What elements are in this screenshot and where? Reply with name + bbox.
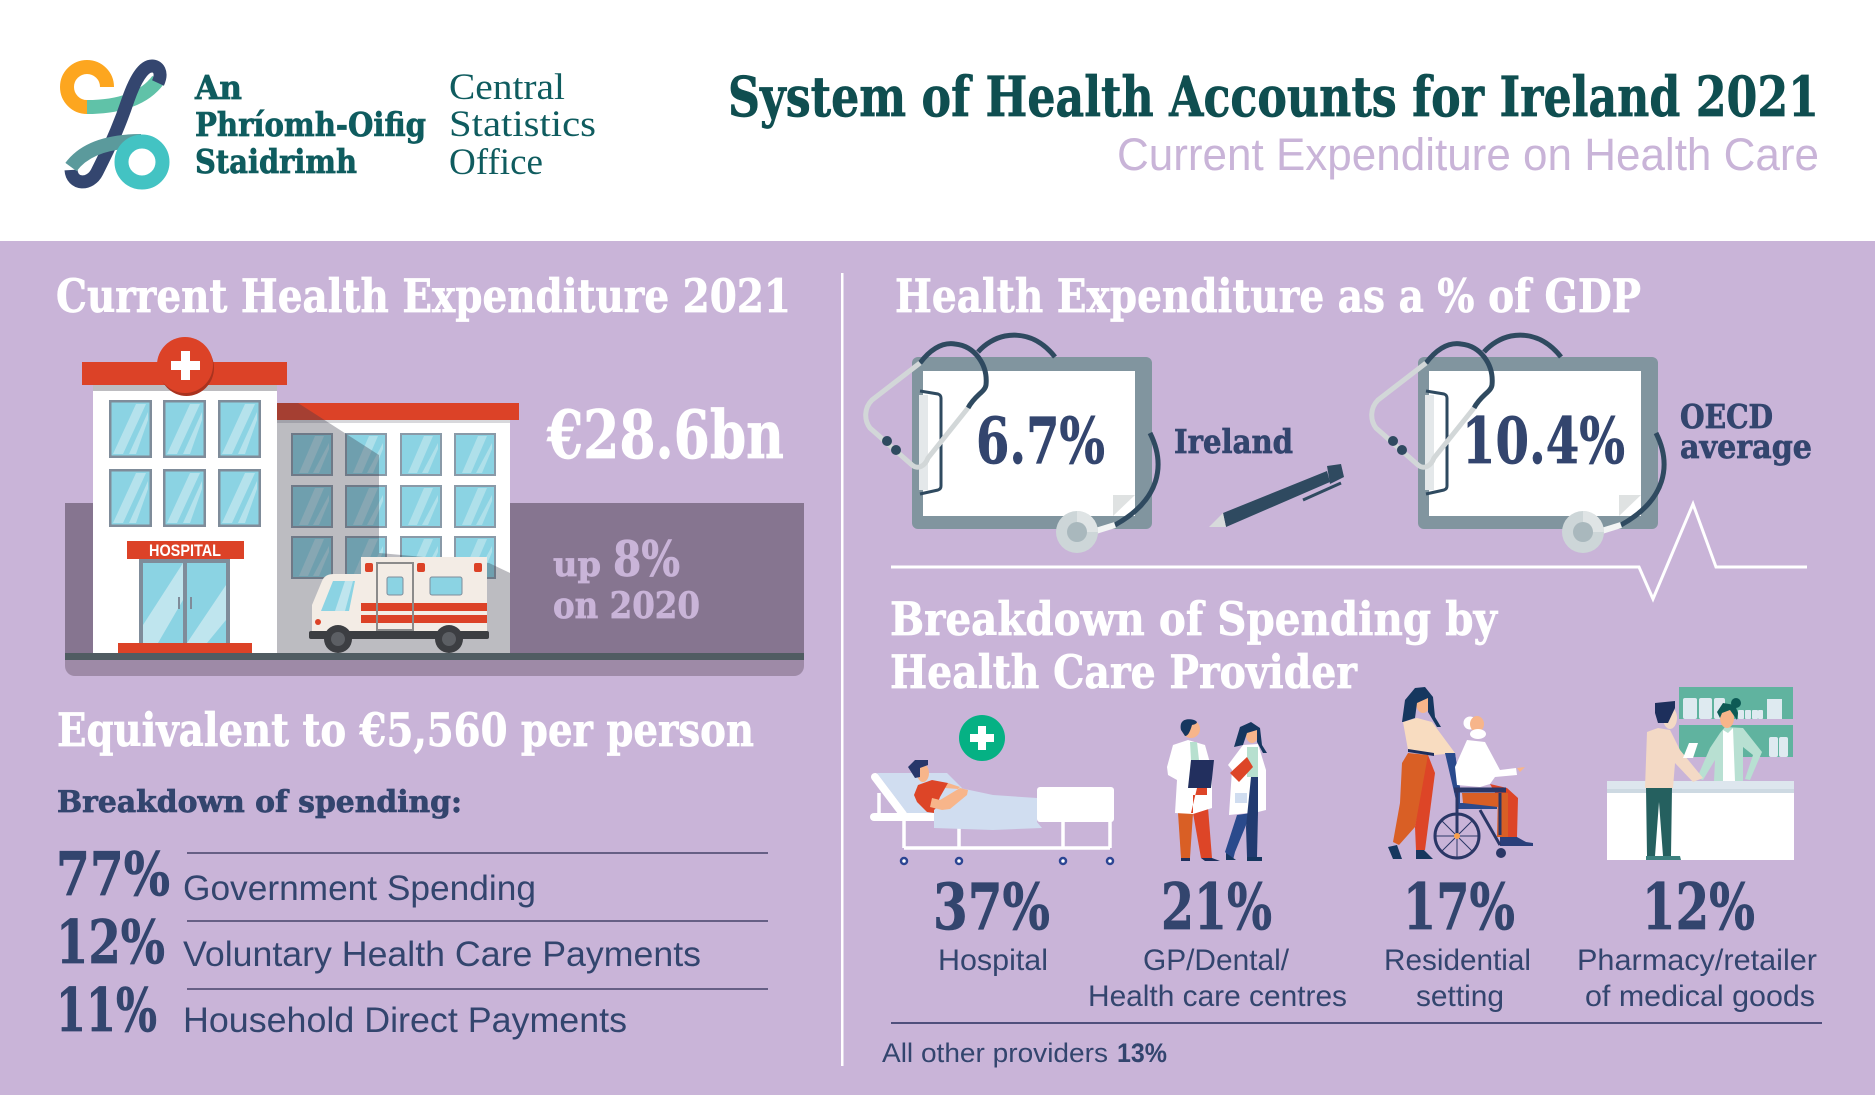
icon: green cross xyxy=(959,715,1005,761)
logo text: English name xyxy=(449,67,596,183)
ambulance xyxy=(309,557,489,653)
spending breakdown list xyxy=(56,840,768,1046)
heading: breakdown by provider xyxy=(890,592,1498,699)
main hospital building xyxy=(82,337,287,653)
change on 2020: on 2020 xyxy=(553,585,700,627)
row: government: 77% xyxy=(56,840,170,910)
illustration: hospital bed xyxy=(874,715,1114,864)
heading: breakdown by provider: Breakdown of Spending by xyxy=(890,592,1498,646)
stat: GP/dental: GP/Dental/ xyxy=(1143,944,1290,977)
panel: purple main background xyxy=(0,241,1875,1095)
illustration: doctors xyxy=(1167,719,1267,861)
bottom rule xyxy=(891,1022,1822,1024)
heading: GDP: Health Expenditure as a % of GDP xyxy=(895,269,1641,323)
row: government: Government Spending xyxy=(183,869,536,908)
stat: residential: setting xyxy=(1416,980,1504,1013)
ECG line xyxy=(891,504,1807,599)
stat: GP/dental xyxy=(1088,870,1347,1013)
clipboard: Ireland xyxy=(866,335,1158,553)
stat: pharmacy: 12% xyxy=(1642,870,1755,945)
logo: Central Statistics Office xyxy=(67,66,596,183)
label: OECD average: OECD xyxy=(1680,397,1773,436)
logo text: English name: Central xyxy=(449,67,565,108)
stat: GP/dental: 21% xyxy=(1161,870,1272,945)
total expenditure figure: €28.6bn xyxy=(546,396,784,474)
stat: pharmacy xyxy=(1577,870,1817,1013)
ground band xyxy=(65,503,804,653)
ground line xyxy=(65,653,804,660)
stat: hospital: Hospital xyxy=(938,944,1048,977)
footnote: all other providers: All other providers xyxy=(882,1038,1108,1068)
row: voluntary: 12% xyxy=(56,908,165,978)
label: Ireland: Ireland xyxy=(1174,422,1293,461)
logo text: Irish name: An xyxy=(194,68,242,107)
stat: pharmacy: of medical goods xyxy=(1585,980,1815,1013)
illustration: pharmacy xyxy=(1607,687,1794,860)
label: OECD average: average xyxy=(1680,427,1812,466)
change on 2020: up xyxy=(553,545,601,585)
row: household xyxy=(56,976,768,1046)
subtitle: Current Expenditure on Health Care xyxy=(1117,129,1819,180)
heading: per person: Equivalent to €5,560 per person xyxy=(57,703,754,757)
logo text: English name: Statistics xyxy=(449,104,596,145)
label: OECD average xyxy=(1680,397,1812,466)
main hospital building: HOSPITAL xyxy=(149,541,221,560)
panel: white header background xyxy=(0,0,1875,241)
row: government xyxy=(56,840,768,910)
change on 2020 xyxy=(553,530,700,627)
stat: residential xyxy=(1384,870,1531,1013)
clipboard: OECD xyxy=(1372,335,1664,553)
row: voluntary xyxy=(56,908,768,978)
vertical divider xyxy=(841,273,844,1066)
stat: hospital: 37% xyxy=(933,870,1050,945)
hospital scene xyxy=(65,337,804,676)
row: voluntary: Voluntary Health Care Payments xyxy=(183,935,701,974)
stat: residential: 17% xyxy=(1403,870,1515,945)
row: household: 11% xyxy=(56,976,157,1046)
stat: hospital xyxy=(933,870,1050,977)
clipboard: Ireland: 6.7% xyxy=(976,404,1105,479)
heading: current health expenditure: Current Health Expenditure 2021 xyxy=(56,269,791,323)
heading: breakdown by provider: Health Care Provider xyxy=(890,645,1358,699)
second building xyxy=(277,403,519,653)
change on 2020: 8% xyxy=(613,530,680,588)
clipboard: OECD: 10.4% xyxy=(1462,404,1625,479)
icon: pen xyxy=(1209,464,1344,527)
illustration: wheelchair carer xyxy=(1388,687,1533,859)
logo text: Irish name: Staidrimh xyxy=(195,142,357,181)
icon: logo knot xyxy=(67,66,162,182)
stat: pharmacy: Pharmacy/retailer xyxy=(1577,944,1817,977)
footnote: all other providers: 13% xyxy=(1117,1038,1167,1068)
subheading: breakdown of spending: Breakdown of spending: xyxy=(57,785,462,820)
logo text: Irish name: Phríomh-Oifig xyxy=(195,105,426,144)
logo text: Irish name xyxy=(194,68,426,181)
row: household: Household Direct Payments xyxy=(183,1001,627,1040)
logo text: English name: Office xyxy=(449,142,543,183)
stat: GP/dental: Health care centres xyxy=(1088,980,1347,1013)
ground lower strip xyxy=(65,660,804,676)
stat: residential: Residential xyxy=(1384,944,1531,977)
